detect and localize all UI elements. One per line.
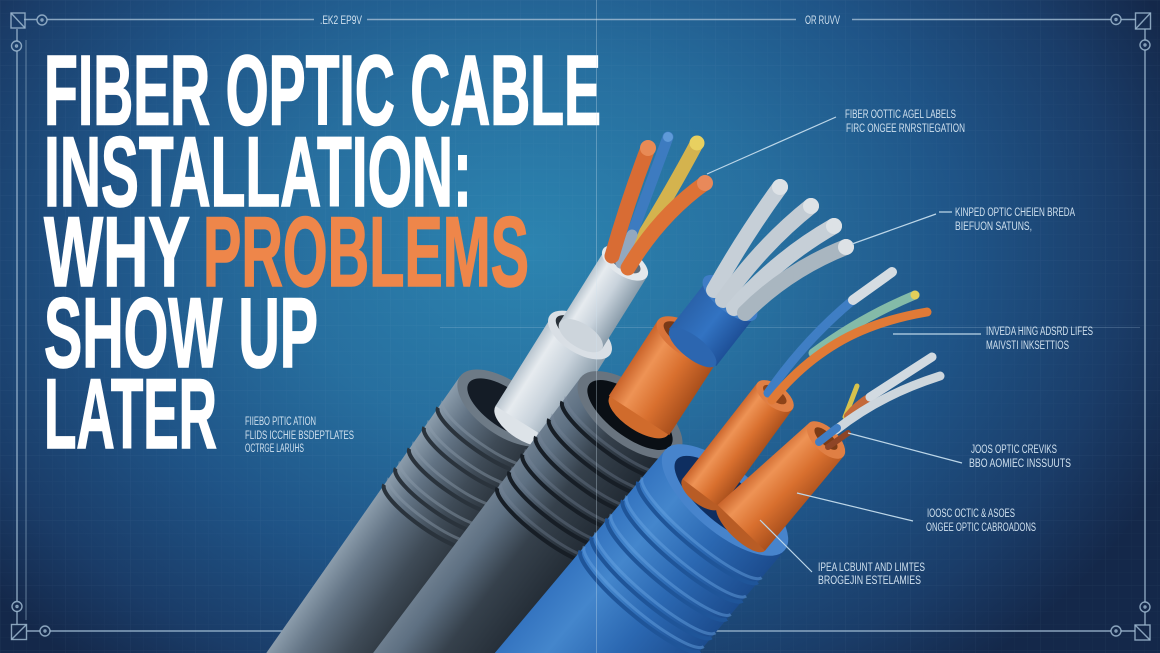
left caption [245,416,354,455]
callout labels: FIRC ONGEE RNRSTIEGATION [846,123,965,135]
callout labels: MAIVSTI INKSETTIOS [986,340,1069,352]
orange outer jacket [601,307,727,448]
bundle 4 fibers [819,357,940,447]
left caption: FIIEBO PITIC ATION [245,416,316,428]
callout labels: IOOSC OCTIC & ASOES [927,508,1015,520]
title: INSTALLATION: [44,116,472,227]
callout leader lines [707,117,981,572]
callout labels: FIBER OOTTIC AGEL LABELS [845,109,956,121]
callout labels: ONGEE OPTIC CABROADONS [926,522,1036,534]
top frame labels: .EK2 EP9V [320,15,362,27]
orange tube A [676,373,801,517]
dark conduit cable [373,355,697,653]
title: LATER [44,358,217,469]
top frame labels: OR RUVV [805,15,840,27]
title: FIBER OPTIC CABLE [44,34,601,146]
callout labels: BBO AOMIEC INSSUUTS [969,458,1071,470]
title: PROBLEMS [203,196,529,307]
left caption: OCTRGE LARUHS [245,443,304,455]
blue sleeve [659,267,765,376]
callout labels [818,109,1093,587]
top frame labels [320,15,840,27]
callout labels: BIEFUON SATUNS, [955,221,1032,233]
white outer jacket [485,301,620,457]
callout labels: IPEA LCBUNT AND LIMTES [818,562,925,574]
gray conduit cable [266,354,566,653]
vertical guide line [596,0,598,653]
white inner tube [552,238,654,359]
title: WHY [44,196,190,307]
title [44,34,601,469]
horizontal guide line [440,326,1140,328]
callout labels: BROGEJIN ESTELAMIES [818,575,921,587]
orange tube B [709,408,858,559]
callout labels: INVEDA HING ADSRD LIFES [986,326,1093,338]
left caption: FLIDS ICCHIE BSDEPTLATES [245,430,354,442]
callout labels: KINPED OPTIC CHEIEN BREDA [955,207,1075,219]
bundle 3 fibers [768,272,927,400]
bundle 1 coloured fibers [612,132,713,268]
callout labels: JOOS OPTIC CREVIKS [971,444,1057,456]
title: SHOW UP [44,277,318,388]
bundle 2 gray fibers [714,179,854,313]
blue conduit cable [495,425,805,653]
